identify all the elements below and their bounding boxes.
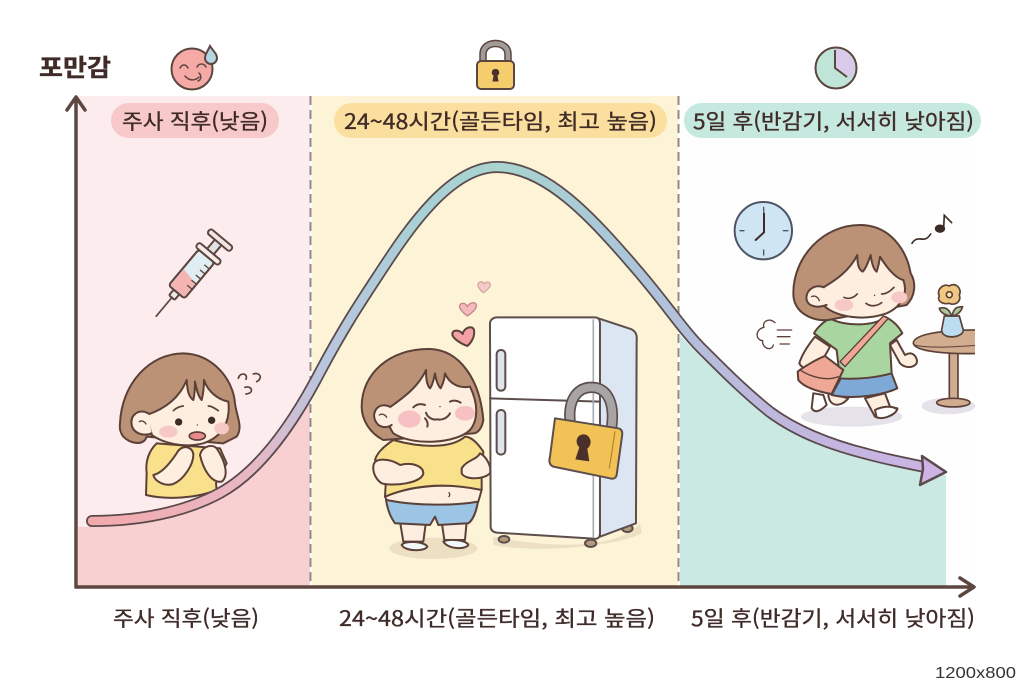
character: walking calm child — [757, 225, 917, 427]
illustration: music note — [912, 215, 952, 243]
strap — [840, 316, 888, 367]
area under curve: teal — [680, 335, 946, 587]
hair — [120, 353, 240, 443]
vase — [942, 316, 963, 337]
flower — [938, 285, 960, 304]
bag — [798, 356, 843, 394]
icon: padlock — [477, 40, 514, 89]
shirt — [375, 437, 483, 497]
floor shadow — [493, 523, 642, 549]
feet — [499, 536, 509, 543]
size note: 1200x800 — [935, 665, 1016, 682]
pill label: low — [111, 103, 279, 138]
illustration: locked fridge — [490, 317, 642, 549]
hair — [362, 349, 483, 440]
pill label: half-life: 5일 후(반감기, 서서히 낮아짐) — [693, 106, 974, 136]
divider right — [678, 96, 680, 587]
legs — [812, 393, 827, 411]
icon: syringe — [145, 228, 233, 326]
front — [490, 317, 600, 539]
character: happy full child — [362, 282, 490, 559]
panel: immediately after injection background — [78, 96, 310, 587]
curve: satiety over time — [92, 167, 946, 521]
arrowhead — [920, 456, 946, 485]
hair — [793, 225, 914, 320]
skirt — [832, 373, 897, 397]
hands — [153, 447, 193, 485]
hearts — [478, 282, 490, 293]
x axis arrow — [76, 578, 974, 596]
x label: peak: 24~48시간(골든타임, 최고 높음) — [339, 603, 655, 633]
worry marks — [238, 374, 260, 394]
character: worried child — [120, 353, 260, 498]
side — [598, 318, 637, 537]
ear — [131, 412, 152, 435]
shirt — [146, 443, 227, 498]
shirt — [814, 317, 902, 379]
puff lines — [757, 320, 792, 349]
area under curve: pink — [78, 396, 310, 587]
handles — [497, 350, 505, 391]
legs — [400, 522, 467, 542]
face — [388, 370, 476, 442]
floor shadow — [801, 407, 902, 427]
pill label: peak: 24~48시간(골든타임, 최고 높음) — [344, 106, 657, 136]
axis title: 포만감 — [39, 48, 111, 83]
panel: golden time background — [312, 96, 678, 587]
x label: half-life: 5일 후(반감기, 서서히 낮아짐) — [691, 603, 975, 633]
belly — [385, 486, 482, 505]
pill label: low: 주사 직후(낮음) — [122, 106, 268, 136]
arms — [890, 340, 917, 367]
y axis arrow — [67, 97, 85, 587]
floor shadow — [389, 538, 477, 559]
big padlock — [549, 387, 622, 479]
panel: right background — [680, 96, 976, 587]
shorts — [386, 500, 478, 525]
face — [822, 255, 905, 318]
illustration: side table with flower — [912, 284, 975, 414]
icon: sweating face — [172, 46, 217, 90]
icon: clock — [816, 48, 856, 88]
x label: low: 주사 직후(낮음) — [113, 603, 259, 633]
divider left — [310, 96, 312, 587]
hands — [373, 460, 423, 485]
face — [147, 380, 229, 445]
illustration: clock on wall — [735, 202, 792, 259]
